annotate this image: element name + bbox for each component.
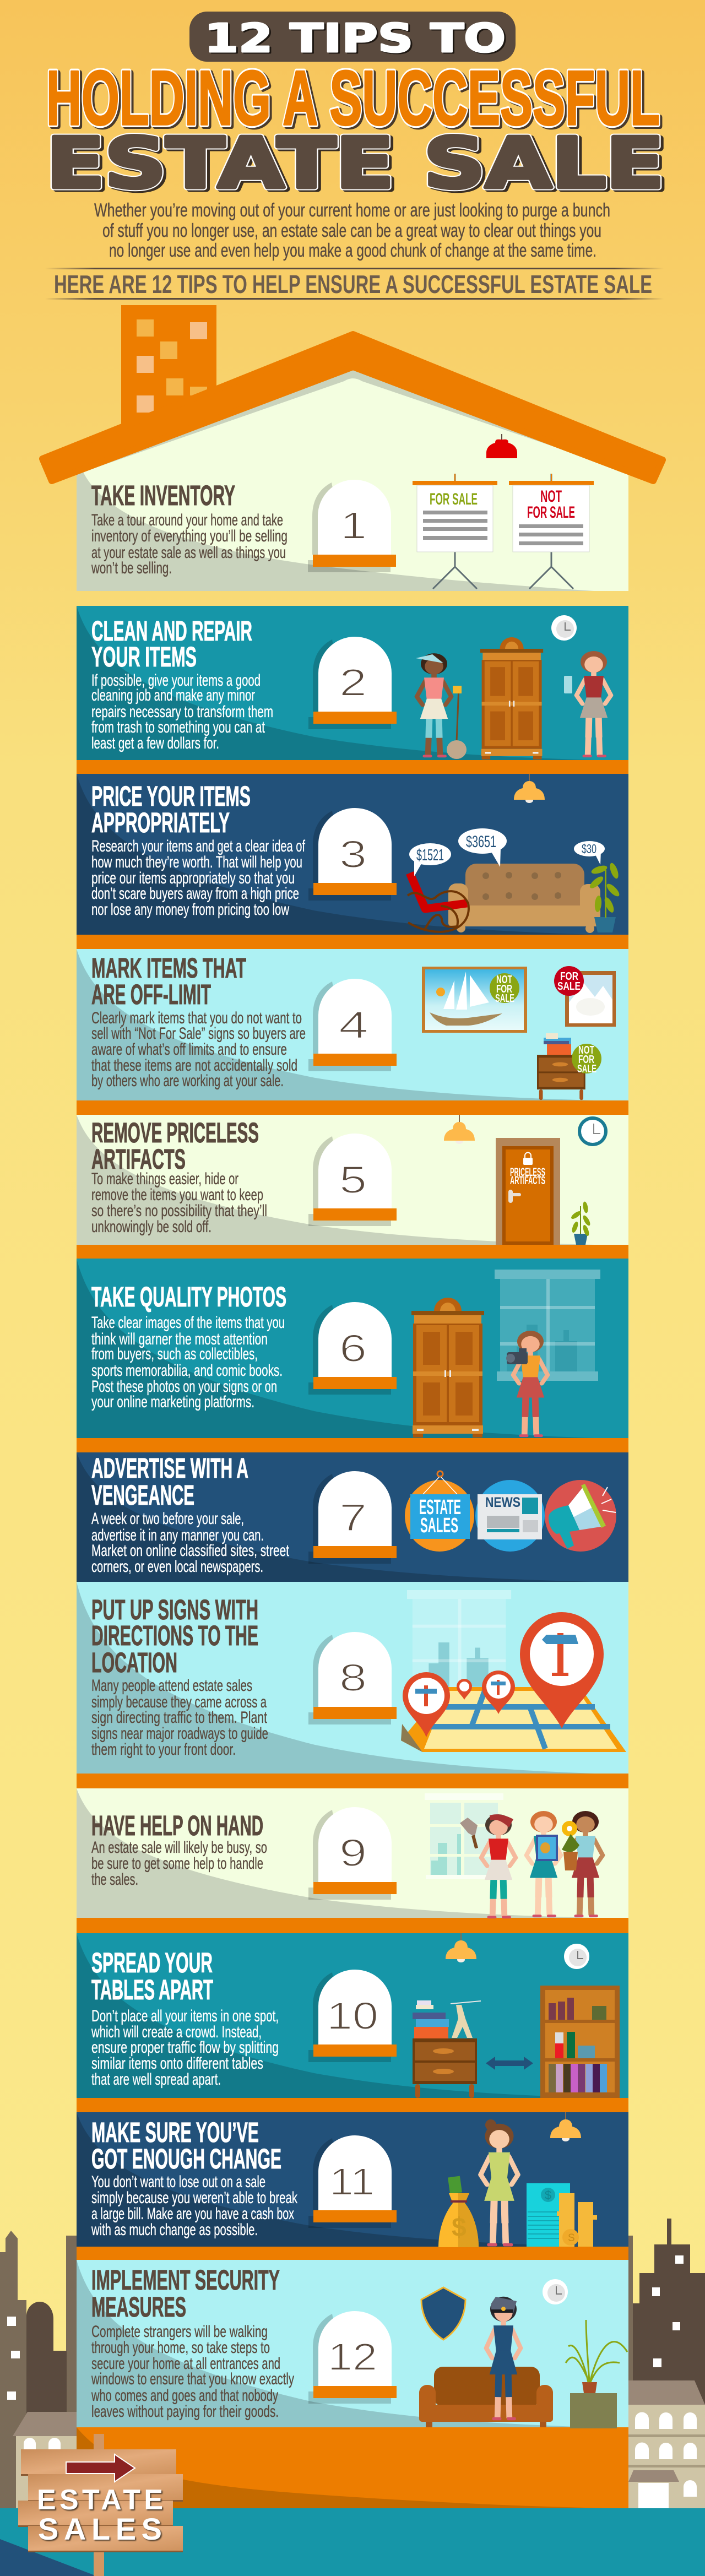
lamp: [550, 2112, 581, 2141]
clock: [543, 2279, 568, 2304]
body text: sell with “Not For Sale” signs so buyers are: [91, 1024, 306, 1043]
sign: not for sale: [509, 474, 594, 589]
number tile 12: 12: [328, 2335, 377, 2378]
number tile 1: 1: [340, 504, 367, 547]
body text: Post these photos on your signs or on: [91, 1378, 277, 1396]
body text: Don’t place all your items in one spot,: [91, 2007, 279, 2025]
body text: how much they’re worth. That will help you: [91, 853, 302, 871]
sign: not for sale: NOT: [540, 487, 562, 506]
bookcase: [540, 1986, 620, 2098]
body text: by others who are working at your sale.: [91, 1072, 284, 1090]
map: [401, 1687, 626, 1752]
picture: polar bear: SALE: [557, 980, 581, 993]
intro paragraph: [94, 200, 610, 261]
body text: nor lose any money from pricing too low: [91, 901, 289, 919]
heading: PRICE YOUR ITEMS: [91, 780, 251, 812]
nightstand with books: FOR: [578, 1054, 594, 1066]
sign: for sale: FOR SALE: [430, 490, 478, 508]
body text: [91, 671, 273, 752]
city skyline right: [628, 2219, 705, 2508]
body text: don’t scare buyers away from a high price: [91, 885, 299, 903]
body text: won’t be selling.: [91, 559, 172, 577]
body text: [91, 1510, 289, 1576]
heading: PUT UP SIGNS WITH: [91, 1594, 258, 1625]
nightstand with books: SALE: [577, 1063, 596, 1075]
body text: who comes and goes and that nobody: [91, 2387, 278, 2405]
body text: be sure to get some help to handle: [91, 1854, 263, 1873]
heading: YOUR ITEMS: [91, 641, 197, 673]
body text: at your estate sale as well as things you: [91, 544, 286, 562]
body text: [91, 1839, 267, 1889]
picture: sailboat: FOR: [496, 983, 512, 995]
header: [45, 12, 664, 300]
woman with camera: [506, 1331, 547, 1437]
body text: If possible, give your items a good: [91, 671, 261, 690]
plant: [588, 862, 621, 932]
number tile 6: 6: [339, 1327, 367, 1370]
body text: [91, 1677, 268, 1759]
woman with mop: [416, 653, 467, 759]
body text: inventory of everything you’ll be selling: [91, 527, 288, 545]
body text: with as much change as possible.: [91, 2221, 258, 2239]
woman with duster: [460, 1814, 516, 1918]
woman with flower pot: [562, 1811, 603, 1917]
number tile 7: [308, 1471, 397, 1564]
body text: [91, 2323, 294, 2421]
lamp: [444, 1115, 475, 1144]
body text: An estate sale will likely be busy, so: [91, 1839, 267, 1857]
woman with spray bottle: [564, 651, 611, 757]
number tile 4: 4: [339, 1004, 368, 1046]
body text: think will garner the most attention: [91, 1330, 268, 1348]
body text: Research your items and get a clear idea of: [91, 837, 305, 855]
lamp: [446, 1933, 476, 1962]
body text: them right to your front door.: [91, 1740, 236, 1759]
number tile 11: 11: [329, 2160, 375, 2203]
clock: [564, 1944, 589, 1969]
rocking chair: [408, 873, 469, 932]
body text: signs near major roadways to guide: [91, 1724, 268, 1743]
number tile 5: 5: [339, 1158, 367, 1201]
body text: Clearly mark items that you do not want to: [91, 1009, 302, 1027]
price bubbles: $3651: [466, 833, 496, 851]
heading: [91, 615, 252, 673]
panel 5: remove priceless artifacts: [77, 1115, 628, 1259]
number tile 8: [308, 1632, 397, 1724]
coin stacks: [557, 2193, 597, 2247]
heading: DIRECTIONS TO THE: [91, 1620, 258, 1651]
picture: sailboat: SALE: [495, 993, 514, 1005]
heading: [91, 952, 246, 1010]
number tile 2: [308, 637, 397, 729]
clock: [551, 615, 577, 641]
body text: leaves without paying for their goods.: [91, 2403, 279, 2421]
body text: [91, 1314, 285, 1411]
body text: from buyers, such as collectibles,: [91, 1345, 258, 1363]
picture: sailboat: [422, 967, 527, 1033]
panel 9: have help on hand: [77, 1788, 628, 1933]
number tile 10: 10: [327, 1994, 378, 2037]
police officer: [486, 2297, 520, 2420]
panel 7: advertise with a vengeance: [77, 1452, 628, 1582]
heading: ADVERTISE WITH A: [91, 1452, 248, 1484]
heading: SPREAD YOUR: [91, 1947, 213, 1978]
city skyline left: [0, 2231, 77, 2508]
body text: Complete strangers will be walking: [91, 2323, 268, 2341]
heading: [91, 2117, 281, 2174]
body text: You don’t want to lose out on a sale: [91, 2173, 265, 2191]
heading: [91, 2264, 280, 2323]
number tile 8: 8: [339, 1656, 367, 1699]
heading: VENGEANCE: [91, 1479, 194, 1511]
body text: cleaning job and make any minor: [91, 686, 255, 704]
panel 10: spread your tables apart: [77, 1933, 628, 2112]
cash stack: $: [545, 2188, 551, 2202]
body text: the sales.: [91, 1870, 138, 1889]
body text: advertise it in any manner you can.: [91, 1526, 264, 1544]
icon: estate sales sign: SALES: [420, 1514, 458, 1537]
heading: [91, 1594, 258, 1678]
body text: repairs necessary to transform them: [91, 703, 273, 721]
number tile 7: 7: [339, 1496, 367, 1539]
arrow: [66, 2454, 135, 2482]
body text: windows to ensure that you know exactly: [91, 2370, 294, 2388]
body text: similar items onto different tables: [91, 2054, 263, 2073]
number tile 2: 2: [339, 661, 367, 704]
body text: [91, 1009, 306, 1090]
body text: through your home, so take steps to: [91, 2339, 270, 2357]
sign text: SALES: [38, 2512, 162, 2546]
body text: Take clear images of the items that you: [91, 1314, 285, 1332]
number tile 6: [308, 1302, 397, 1395]
window: [425, 1793, 503, 1879]
heading: [91, 1452, 248, 1511]
title pill: 12 tips to: 12 TIPS TO: [204, 15, 506, 61]
shield: [421, 2287, 465, 2340]
number tile 9: [308, 1807, 397, 1900]
cash stack: [527, 2183, 570, 2247]
heading: HAVE HELP ON HAND: [91, 1810, 263, 1841]
number tile 9: 9: [339, 1831, 367, 1874]
panel 2: clean and repair: [77, 606, 628, 774]
roof: [42, 334, 663, 481]
body text: so there’s no possibility that they’ll: [91, 1202, 267, 1220]
body text: least get a few dollars for.: [91, 734, 219, 752]
panel 12: implement security measures: [77, 2260, 628, 2508]
icon: newspaper: NEWS: [485, 1495, 520, 1510]
heading: REMOVE PRICELESS: [91, 1117, 259, 1148]
money bag: $: [452, 2213, 467, 2242]
number tile 4: [308, 979, 397, 1071]
body text: that are well spread apart.: [91, 2070, 221, 2089]
coin stacks: S: [568, 2232, 575, 2244]
door: priceless artifacts: PRICELESS: [510, 1166, 545, 1179]
plant: [570, 1201, 592, 1245]
price bubbles: $1521: [416, 847, 444, 864]
heading: GOT ENOUGH CHANGE: [91, 2143, 281, 2174]
body text: Take a tour around your home and take: [91, 511, 283, 529]
body text: which will create a crowd. Instead,: [91, 2023, 262, 2041]
heading: ARTIFACTS: [91, 1143, 186, 1175]
heading: [91, 1117, 259, 1175]
lamp: red: [486, 434, 517, 458]
map pins: [403, 1612, 604, 1737]
number tile 3: 3: [339, 833, 367, 876]
money bag: [438, 2176, 479, 2247]
panel 3: price your items: [77, 774, 628, 949]
heading: IMPLEMENT SECURITY: [91, 2264, 280, 2296]
price bubbles: $30: [582, 842, 596, 856]
heading: MARK ITEMS THAT: [91, 952, 246, 984]
door: priceless artifacts: ARTIFACTS: [510, 1174, 545, 1187]
sign text: ESTATE: [37, 2484, 163, 2516]
body text: sports memorabilia, and comic books.: [91, 1362, 283, 1380]
icon: newspaper: [475, 1480, 545, 1552]
number tile 12: [308, 2311, 397, 2404]
couch: [448, 864, 600, 933]
door: priceless artifacts: [496, 1138, 560, 1245]
number tile 10: [308, 1970, 397, 2062]
woman with picture: [527, 1811, 561, 1917]
nightstand with books: NOT: [578, 1044, 594, 1056]
body text: [91, 837, 305, 919]
panel 8: put up signs: [77, 1582, 628, 1788]
ground: [0, 2508, 705, 2576]
price bubbles: [409, 828, 605, 876]
panel 6: take quality photos: [77, 1259, 628, 1452]
window: [495, 1270, 600, 1381]
heading: CLEAN AND REPAIR: [91, 615, 252, 647]
potted plant on stand: [566, 2320, 627, 2428]
body text: your online marketing platforms.: [91, 1393, 254, 1411]
couch: [419, 2367, 553, 2427]
sign text: [37, 2484, 163, 2546]
lamp: [514, 774, 545, 803]
nightstand with books and statue: [413, 2000, 481, 2098]
window: [407, 1590, 511, 1696]
panel 11: make sure you've got enough change: [77, 2112, 628, 2260]
wardrobe: [411, 1298, 484, 1438]
estate sales wooden sign: [18, 2434, 183, 2576]
heading: [91, 1947, 213, 2005]
number tile 11: [308, 2135, 397, 2228]
body text: Market on online classified sites, street: [91, 1542, 289, 1560]
body text: remove the items you want to keep: [91, 1186, 263, 1204]
heading: TAKE QUALITY PHOTOS: [91, 1281, 286, 1313]
icon: estate sales sign: [405, 1471, 474, 1552]
icon: estate sales sign: ESTATE: [419, 1496, 461, 1519]
title line: estate sale: ESTATE SALE: [46, 123, 664, 204]
heading: LOCATION: [91, 1647, 177, 1678]
picture: sailboat: NOT: [496, 974, 512, 986]
body text: [91, 2007, 279, 2089]
heading: [91, 780, 251, 838]
picture: polar bear: [554, 966, 616, 1027]
body text: corners, or even local newspapers.: [91, 1558, 263, 1576]
clock: [578, 1116, 608, 1146]
body text: To make things easier, hide or: [91, 1170, 238, 1188]
body text: [91, 511, 288, 577]
title line: estate sale: ESTATE SALE: [46, 123, 664, 204]
sign: not for sale: FOR SALE: [527, 503, 575, 522]
body text: A week or two before your sale,: [91, 1510, 244, 1528]
heading: MEASURES: [91, 2291, 186, 2323]
icon: megaphone: [545, 1480, 616, 1552]
body text: that these items are not accidentally sold: [91, 1056, 297, 1075]
body text: a large bill. Make are you have a cash box: [91, 2205, 294, 2223]
panel 1: take inventory: [42, 334, 663, 591]
sign: for sale: [413, 474, 497, 589]
body text: Many people attend estate sales: [91, 1677, 252, 1695]
panel 4: mark items: [77, 949, 628, 1115]
double arrow: [486, 2057, 533, 2070]
heading: APPROPRIATELY: [91, 807, 230, 838]
body text: [91, 2173, 298, 2239]
body text: simply because they came across a: [91, 1693, 267, 1711]
picture: polar bear: FOR: [560, 970, 578, 983]
heading: MAKE SURE YOU’VE: [91, 2117, 259, 2148]
title pill: 12 tips to: [189, 12, 516, 62]
body text: secure your home at all entrances and: [91, 2355, 280, 2373]
body text: simply because you weren’t able to break: [91, 2189, 298, 2207]
heading: TABLES APART: [91, 1974, 213, 2005]
house: chimney: [121, 305, 216, 424]
woman in green dress: [481, 2119, 518, 2246]
body text: price our items appropriately so that you: [91, 869, 295, 887]
number tile 1: [308, 480, 396, 572]
nightstand with books: [537, 1033, 601, 1100]
body text: ensure proper traffic flow by splitting: [91, 2038, 279, 2057]
body text: [91, 1170, 267, 1236]
number tile 5: [308, 1134, 397, 1226]
body text: unknowingly be sold off.: [91, 1218, 212, 1236]
body text: aware of what’s off limits and to ensure: [91, 1040, 287, 1059]
body text: sign directing traffic to them. Plant: [91, 1709, 267, 1727]
wardrobe: [480, 637, 543, 760]
heading: ARE OFF-LIMIT: [91, 979, 211, 1010]
heading: TAKE INVENTORY: [91, 480, 235, 511]
number tile 3: [308, 808, 397, 901]
body text: from trash to something you can at: [91, 718, 265, 736]
